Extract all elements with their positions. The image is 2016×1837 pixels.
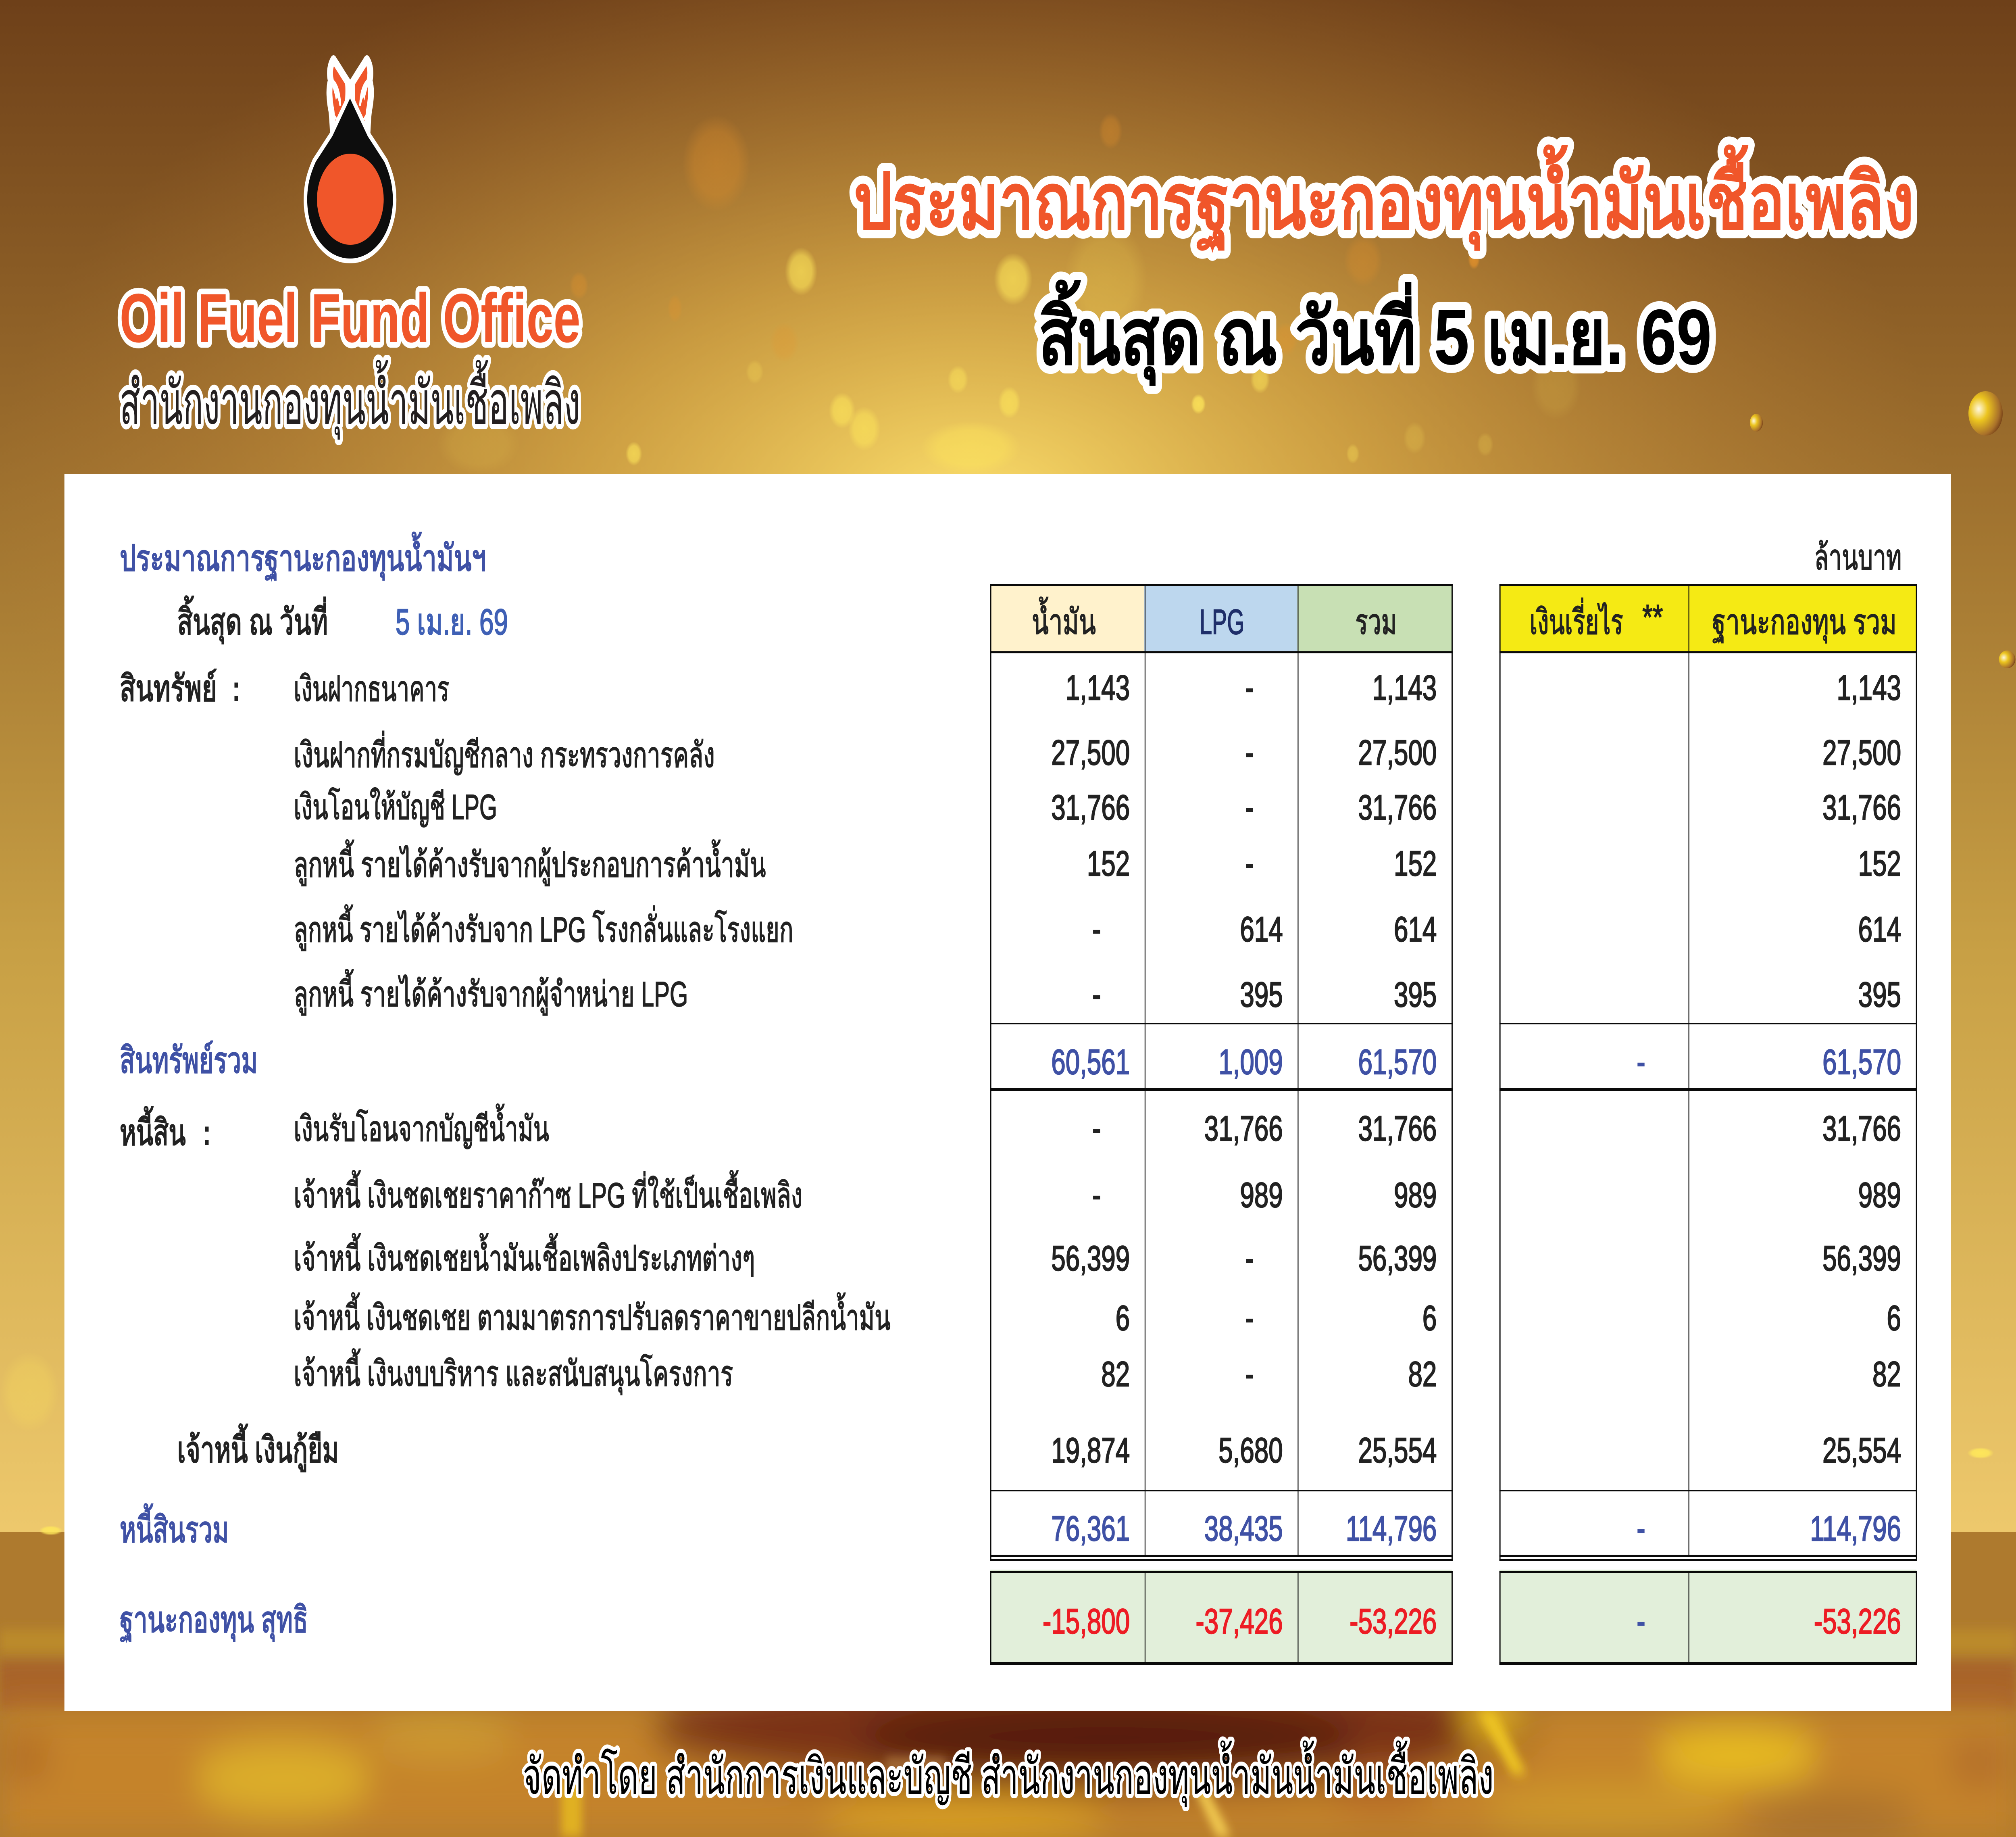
figures: assets: 395	[1858, 975, 1901, 1014]
title: ประมาณการฐานะกองทุนน้ำมันเชื้อเพลิง	[854, 144, 1914, 253]
figures: assets: 31,766	[1822, 788, 1901, 827]
assets labels: ลูกหนี้ รายได้ค้างรับจากผู้ประกอบการค้าน้ำมัน	[294, 840, 766, 886]
assets labels: ลูกหนี้ รายได้ค้างรับจากผู้จำหน่าย LPG	[294, 969, 688, 1015]
logo text: Thai office name: สำนักงานกองทุนน้ำมันเชื้อเพลิง	[120, 359, 581, 440]
figures: assets: -	[1245, 733, 1254, 772]
figures: total assets: 1,009	[1218, 1043, 1283, 1082]
net position row fill	[990, 1570, 1452, 1664]
assets labels: เงินฝากธนาคาร	[294, 669, 449, 709]
figures: assets	[1051, 668, 1901, 1014]
figures: assets: 614	[1240, 910, 1283, 949]
liabilities labels: หนี้สิน	[120, 1106, 186, 1153]
figures: net fund position: -15,800	[1043, 1602, 1130, 1641]
figures: liabilities: 82	[1101, 1355, 1130, 1394]
liabilities labels: :	[202, 1112, 211, 1153]
figures: total liabilities: 76,361	[1051, 1509, 1130, 1548]
header cells: น้ำมัน	[1032, 597, 1096, 642]
figures: liabilities: 6	[1887, 1299, 1901, 1338]
figures: assets: -	[1245, 844, 1254, 883]
figures: liabilities: 31,766	[1358, 1109, 1437, 1148]
figures: assets: 152	[1394, 844, 1437, 883]
figures: liabilities: 19,874	[1051, 1431, 1130, 1470]
figures: liabilities: 6	[1422, 1299, 1437, 1338]
figures: assets: 27,500	[1051, 733, 1130, 772]
figures: assets: 27,500	[1822, 733, 1901, 772]
liabilities labels: เจ้าหนี้ เงินชดเชยราคาก๊าซ LPG ที่ใช้เป็นเชื้อเพลิง	[294, 1170, 802, 1215]
figures: total liabilities	[1051, 1509, 1901, 1548]
figures: assets: 1,143	[1066, 668, 1130, 707]
figures: liabilities: 56,399	[1822, 1239, 1901, 1278]
figures: assets: 614	[1394, 910, 1437, 949]
statement heading: ประมาณการฐานะกองทุนน้ำมันฯ	[120, 532, 486, 582]
figures: liabilities: 989	[1240, 1176, 1283, 1215]
figures: total assets: 61,570	[1822, 1043, 1901, 1082]
figures: liabilities: 25,554	[1358, 1431, 1437, 1470]
figures: net fund position: -	[1637, 1602, 1645, 1641]
figures: assets: -	[1092, 910, 1101, 949]
net fund position label: ฐานะกองทุน สุทธิ	[120, 1599, 308, 1643]
figures: liabilities: 5,680	[1218, 1431, 1283, 1470]
figures: liabilities: -	[1245, 1355, 1254, 1394]
assets labels: สินทรัพย์	[120, 668, 217, 709]
figures: liabilities: -	[1092, 1109, 1101, 1148]
figures: assets: 614	[1858, 910, 1901, 949]
figures: total liabilities: 38,435	[1204, 1509, 1283, 1548]
table: levy and fund total	[1500, 584, 1917, 1665]
figures: assets: 395	[1240, 975, 1283, 1014]
figures: assets: -	[1245, 668, 1254, 707]
figures: assets: 152	[1087, 844, 1130, 883]
liabilities labels	[120, 1104, 891, 1550]
assets labels	[120, 668, 793, 1080]
header cells: รวม	[1355, 603, 1397, 642]
figures: liabilities	[1051, 1109, 1901, 1470]
statement heading: 5 เม.ย. 69	[396, 602, 508, 642]
icon: gold oil droplets	[1750, 391, 2003, 436]
figures: assets: -	[1245, 788, 1254, 827]
assets labels: เงินโอนให้บัญชี LPG	[294, 787, 497, 827]
figures: assets: 27,500	[1358, 733, 1437, 772]
figures: assets: 152	[1858, 844, 1901, 883]
figures: assets: 31,766	[1051, 788, 1130, 827]
bokeh light particles	[0, 113, 2016, 1535]
liabilities labels: เจ้าหนี้ เงินชดเชย ตามมาตรการปรับลดราคาขายปลีกน้ำมัน	[294, 1293, 891, 1337]
figures: liabilities: 6	[1116, 1299, 1130, 1338]
assets labels: :	[232, 668, 241, 709]
figures: assets: 1,143	[1837, 668, 1901, 707]
statement heading: สิ้นสุด ณ วันที่	[177, 595, 328, 644]
figures: liabilities: 82	[1408, 1355, 1437, 1394]
assets labels: ลูกหนี้ รายได้ค้างรับจาก LPG โรงกลั่นและโรงแยก	[294, 905, 793, 951]
header cells	[990, 585, 1452, 652]
figures: liabilities: -	[1245, 1299, 1254, 1338]
figures: liabilities: 31,766	[1204, 1109, 1283, 1148]
liabilities labels: เงินรับโอนจากบัญชีน้ำมัน	[294, 1104, 549, 1149]
figures: assets: -	[1092, 975, 1101, 1014]
header cells: LPG	[1200, 603, 1244, 642]
logo: flame and oil drop	[307, 59, 393, 259]
table: oil, LPG, total	[990, 584, 1453, 1665]
footer credit: จัดทำโดย สำนักการเงินและบัญชี สำนักงานกองทุนน้ำมันน้ำมันเชื้อเพลิง	[523, 1741, 1494, 1807]
header cells: เงินเรี่ยไร	[1529, 598, 1623, 642]
liabilities labels: เจ้าหนี้ เงินชดเชยน้ำมันเชื้อเพลิงประเภทต่างๆ	[294, 1233, 755, 1278]
figures: net fund position: -53,226	[1350, 1602, 1437, 1641]
header cells: ฐานะกองทุน รวม	[1712, 603, 1897, 643]
figures: assets: 31,766	[1358, 788, 1437, 827]
figures: net fund position	[1043, 1602, 1901, 1641]
figures: liabilities: 989	[1394, 1176, 1437, 1215]
figures: net fund position: -53,226	[1814, 1602, 1901, 1641]
liabilities labels: เจ้าหนี้ เงินงบบริหาร และสนับสนุนโครงการ	[294, 1349, 733, 1395]
header cells: **	[1642, 598, 1663, 637]
figures: total assets: 61,570	[1358, 1043, 1437, 1082]
figures: total assets	[1051, 1043, 1901, 1082]
figures: total assets: -	[1637, 1043, 1645, 1082]
figures: total liabilities: 114,796	[1810, 1509, 1901, 1548]
table rules	[1500, 584, 1917, 1665]
figures: liabilities: 31,766	[1822, 1109, 1901, 1148]
figures: liabilities: 989	[1858, 1176, 1901, 1215]
figures: liabilities: 56,399	[1051, 1239, 1130, 1278]
figures: liabilities: 82	[1872, 1355, 1901, 1394]
figures: total liabilities: 114,796	[1346, 1509, 1437, 1548]
liabilities labels: เจ้าหนี้ เงินกู้ยืม	[177, 1423, 339, 1473]
figures: liabilities: -	[1092, 1176, 1101, 1215]
figures: liabilities: 56,399	[1358, 1239, 1437, 1278]
net position row fill	[1500, 1570, 1916, 1664]
figures: total assets: 60,561	[1051, 1043, 1130, 1082]
statement heading	[120, 532, 508, 644]
unit label: ล้านบาท	[1814, 538, 1901, 577]
table rules	[990, 584, 1453, 1665]
panel: white statement sheet	[65, 474, 1951, 1711]
liabilities labels: หนี้สินรวม	[120, 1503, 229, 1550]
figures: total liabilities: -	[1637, 1509, 1645, 1548]
assets labels: เงินฝากที่กรมบัญชีกลาง กระทรวงการคลัง	[294, 731, 715, 775]
assets labels: สินทรัพย์รวม	[120, 1040, 258, 1080]
figures: net fund position: -37,426	[1196, 1602, 1283, 1641]
header cells	[1500, 585, 1916, 652]
subtitle: date: สิ้นสุด ณ วันที่ 5 เม.ย. 69	[1038, 279, 1712, 386]
figures: liabilities: -	[1245, 1239, 1254, 1278]
figures: liabilities: 25,554	[1822, 1431, 1901, 1470]
logo text: Oil Fuel Fund Office: Oil Fuel Fund Office	[120, 279, 581, 357]
figures: assets: 395	[1394, 975, 1437, 1014]
figures: assets: 1,143	[1372, 668, 1437, 707]
